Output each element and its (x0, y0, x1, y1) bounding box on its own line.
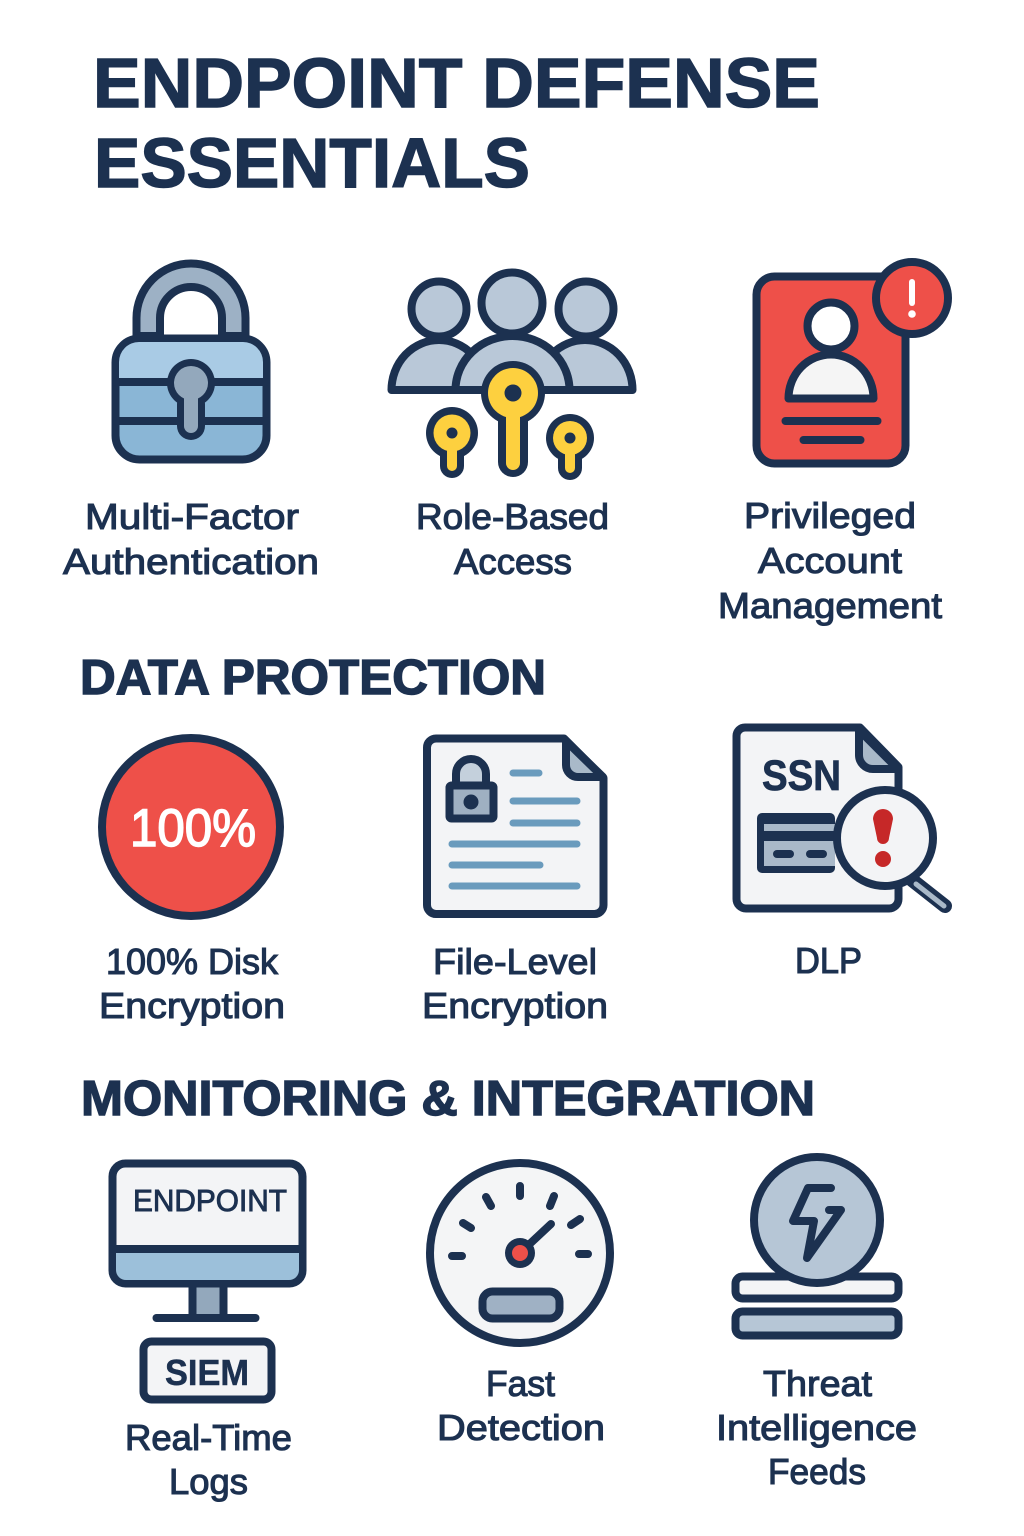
label: file-level encryption: File-Level (433, 941, 597, 982)
label: fast detection: Detection (437, 1407, 605, 1448)
label: threat intelligence feeds: Feeds (768, 1451, 866, 1492)
label: privileged account management: Management (718, 585, 942, 626)
label: real-time logs (125, 1417, 292, 1502)
label: privileged account management: Privileged (744, 495, 916, 536)
icon: endpoint monitor and SIEM (112, 1164, 302, 1400)
icon: encrypted file (427, 738, 604, 914)
icon: threat intelligence feeds (736, 1157, 898, 1336)
heading: monitoring and integration: MONITORING & INTEGRATION (81, 1072, 815, 1126)
label: fast detection (437, 1363, 605, 1448)
heading: data protection: DATA PROTECTION (80, 651, 546, 705)
label: file-level encryption: Encryption (422, 985, 608, 1026)
label: 100% disk encryption: Encryption (99, 985, 285, 1026)
label: real-time logs: Real-Time (125, 1417, 292, 1458)
label: multi-factor authentication: Authentication (63, 541, 319, 582)
label: role-based access: Access (454, 541, 572, 582)
label: DLP: DLP (795, 940, 862, 981)
label: role-based access (416, 496, 609, 582)
icon: DLP document with magnifier (736, 728, 945, 908)
label: threat intelligence feeds: Intelligence (716, 1407, 917, 1448)
title: ESSENTIALS (94, 124, 530, 202)
icon: privileged account card with alert (756, 262, 948, 464)
icon: padlock (116, 264, 266, 460)
label: 100% disk encryption (99, 941, 285, 1026)
title (93, 44, 820, 202)
label: file-level encryption (422, 941, 608, 1026)
icon: users with keys (392, 272, 633, 480)
icon: 100% disk encryption (102, 738, 280, 916)
label: threat intelligence feeds (716, 1363, 917, 1492)
label: multi-factor authentication (63, 496, 319, 582)
icon: DLP document with magnifier: SSN (762, 752, 841, 800)
icon: endpoint monitor and SIEM: ENDPOINT (133, 1183, 287, 1218)
label: fast detection: Fast (486, 1363, 555, 1404)
label: real-time logs: Logs (169, 1461, 248, 1502)
label: threat intelligence feeds: Threat (763, 1363, 872, 1404)
label: 100% disk encryption: 100% Disk (106, 941, 279, 982)
label: role-based access: Role-Based (416, 496, 609, 537)
label: privileged account management: Account (758, 540, 902, 581)
icon: 100% disk encryption: 100% (130, 799, 256, 858)
label: multi-factor authentication: Multi-Factor (85, 496, 299, 537)
title: ENDPOINT DEFENSE (93, 44, 820, 122)
icon: endpoint monitor and SIEM: SIEM (165, 1352, 249, 1393)
icon: speed gauge (430, 1163, 610, 1343)
label: privileged account management (718, 495, 942, 626)
